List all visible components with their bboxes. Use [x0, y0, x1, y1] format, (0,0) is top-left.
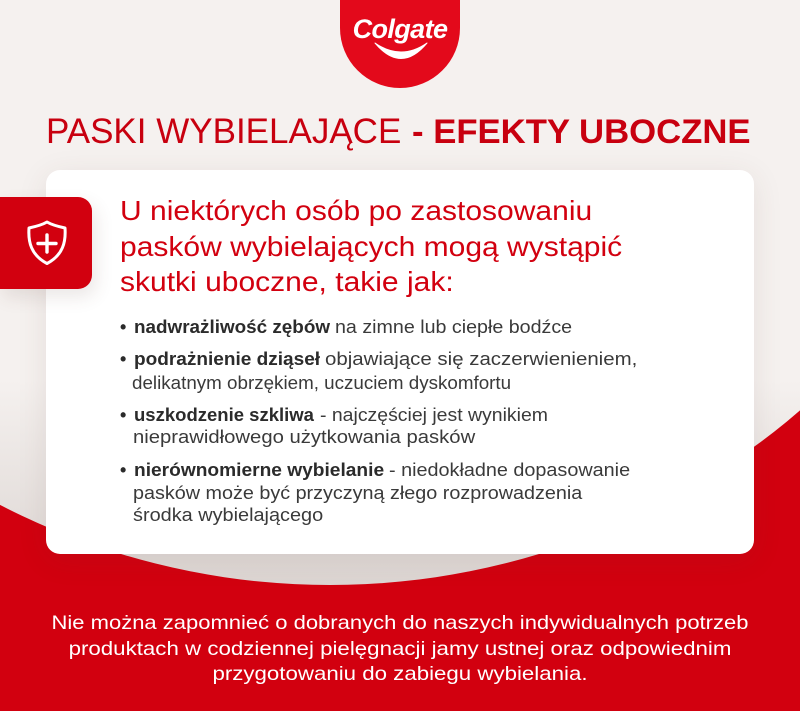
bullet: uszkodzenie: • — [120, 405, 126, 425]
bullet: nadwrażliwość: na zimne lub ciepłe bodźce — [335, 317, 572, 337]
title — [46, 112, 751, 151]
logo badge — [340, 0, 460, 88]
bullet: nierównomierne: nierównomierne wybielanie — [134, 460, 384, 480]
bullet: podrażnienie: delikatnym obrzękiem, uczuciem dyskomfortu — [132, 373, 511, 393]
bullet: nierównomierne: pasków może być przyczyną złego rozprowadzenia — [133, 483, 582, 503]
lead text: U niektórych osób po zastosowaniu — [120, 195, 592, 226]
bullet: nierównomierne — [120, 460, 630, 525]
bullet: podrażnienie: • — [120, 349, 126, 369]
bullet: nadwrażliwość: • — [120, 317, 126, 337]
title bold part: - EFEKTY UBOCZNE — [412, 113, 751, 151]
footer text: przygotowaniu do zabiegu wybielania. — [212, 663, 588, 685]
white content card — [46, 170, 754, 554]
bullet: podrażnienie — [120, 349, 637, 393]
logo smile — [374, 42, 428, 59]
logo wordmark: Colgate — [353, 14, 447, 44]
lead text: skutki uboczne, takie jak: — [120, 266, 454, 297]
lead text: pasków wybielających mogą wystąpić — [120, 231, 622, 262]
bullet: podrażnienie: podrażnienie dziąseł — [134, 349, 320, 369]
bullet: nierównomierne: - niedokładne dopasowanie — [389, 460, 630, 480]
bullet: uszkodzenie — [120, 405, 548, 447]
footer text: produktach w codziennej pielęgnacji jamy ustnej oraz odpowiednim — [69, 638, 731, 660]
lead text — [120, 195, 622, 297]
title: PASKI WYBIELAJĄCE — [46, 112, 401, 151]
bullet: uszkodzenie: nieprawidłowego użytkowania pasków — [133, 427, 475, 447]
footer text: Nie można zapomnieć o dobranych do naszych indywidualnych potrzeb — [52, 612, 748, 634]
bullet: nierównomierne: • — [120, 460, 126, 480]
icon tab: shield with plus — [0, 197, 92, 289]
bullet: nadwrażliwość — [120, 317, 572, 337]
bullet: nadwrażliwość: nadwrażliwość zębów — [134, 317, 330, 337]
bullet: nierównomierne: środka wybielającego — [133, 505, 323, 525]
footer text — [52, 612, 748, 685]
bullet: podrażnienie: objawiające się zaczerwienieniem, — [325, 349, 637, 369]
bullet: uszkodzenie: - najczęściej jest wynikiem — [320, 405, 548, 425]
bullet: uszkodzenie: uszkodzenie szkliwa — [134, 405, 314, 425]
